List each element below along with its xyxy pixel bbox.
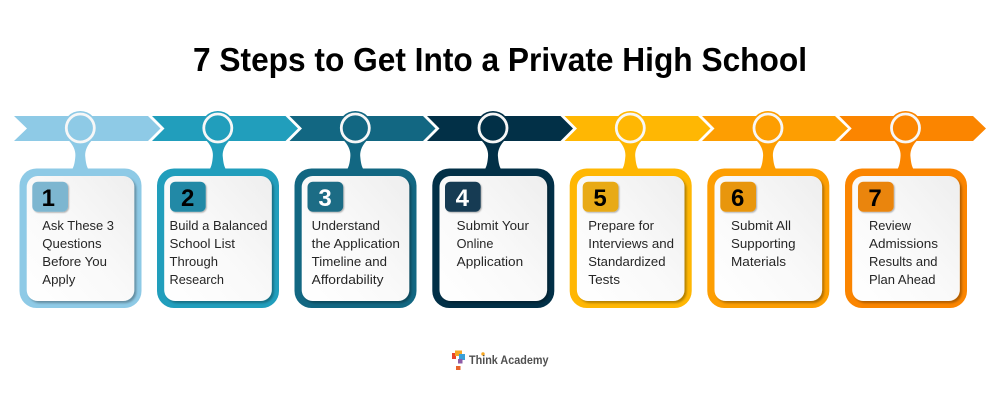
card 6 xyxy=(707,168,829,308)
step 7 xyxy=(839,111,986,308)
connector 1 xyxy=(63,111,97,170)
step 2 xyxy=(152,111,298,308)
arrow 4 xyxy=(427,116,573,141)
card 2 xyxy=(157,168,279,308)
step 3 xyxy=(290,111,436,308)
card 5 panel xyxy=(577,176,684,301)
card 1 xyxy=(20,168,142,308)
step 7 text: Plan Ahead xyxy=(869,273,936,287)
card 1 panel xyxy=(27,176,134,301)
step 2 text xyxy=(170,219,268,287)
title: 7 Steps to Get Into a Private High School xyxy=(193,42,807,79)
step 4 text: Submit Your xyxy=(457,219,529,233)
step 5 xyxy=(564,111,710,308)
step 1 text xyxy=(42,219,114,287)
step 1 text: Before You xyxy=(42,255,107,269)
step 3 text xyxy=(312,219,400,287)
step 1 text: Apply xyxy=(42,273,76,287)
number 7: 7 xyxy=(868,185,882,212)
step 1 xyxy=(14,111,160,308)
step 5 text: Prepare for xyxy=(588,219,654,233)
step 3 text: Affordability xyxy=(312,273,384,287)
card 3 panel xyxy=(302,176,409,301)
logo: Think Academy xyxy=(452,350,549,370)
arrow 2 xyxy=(152,116,298,141)
connector 2 xyxy=(201,111,235,170)
connector 4 xyxy=(476,111,510,170)
number 6: 6 xyxy=(731,185,744,212)
step 4 text xyxy=(457,219,529,269)
step 4 text: Online xyxy=(457,237,493,251)
badge 1 xyxy=(32,182,68,212)
card 2 panel xyxy=(164,176,272,301)
number 4: 4 xyxy=(456,185,470,212)
card 3 xyxy=(294,168,416,308)
step 2 text: Build a Balanced xyxy=(170,219,268,233)
card 4 panel xyxy=(440,176,547,301)
badge 7 xyxy=(858,182,894,212)
step 7 text: Review xyxy=(869,219,912,233)
step 3 text: Understand xyxy=(312,219,380,233)
badge 3 xyxy=(308,182,343,212)
connector 7 xyxy=(888,111,922,170)
logo icon xyxy=(452,350,465,370)
step 6 text: Supporting xyxy=(731,237,796,251)
connector 5 xyxy=(613,111,647,170)
step 1 text: Ask These 3 xyxy=(42,219,114,233)
card 7 xyxy=(845,168,967,308)
badge 6 xyxy=(720,182,756,212)
step 5 text: Tests xyxy=(588,273,620,287)
step 5 text: Interviews and xyxy=(588,237,674,251)
logo text: Think Academy xyxy=(469,355,549,367)
badge 5 xyxy=(583,182,618,212)
step 7 text xyxy=(869,219,938,287)
arrow 7 xyxy=(839,116,986,141)
step 7 text: Admissions xyxy=(869,237,938,251)
card 6 panel xyxy=(714,176,822,301)
step 2 text: School List xyxy=(170,237,236,251)
step 2 text: Through xyxy=(170,255,218,269)
card 7 panel xyxy=(852,176,960,301)
step 4 text: Application xyxy=(457,255,523,269)
badge 2 xyxy=(170,182,206,212)
arrow 6 xyxy=(702,116,848,141)
step 5 text: Standardized xyxy=(588,255,666,269)
step 3 text: Timeline and xyxy=(312,255,387,269)
connector 3 xyxy=(338,111,372,170)
connector 6 xyxy=(751,111,785,170)
step 7 text: Results and xyxy=(869,255,938,269)
number 5: 5 xyxy=(593,185,607,212)
number 1: 1 xyxy=(42,185,55,212)
card 5 xyxy=(570,168,692,308)
step 6 text: Materials xyxy=(731,255,786,269)
step 2 text: Research xyxy=(170,273,224,287)
number 3: 3 xyxy=(318,185,332,212)
logo bulb xyxy=(481,352,485,356)
step 6 text: Submit All xyxy=(731,219,791,233)
step 4 xyxy=(427,111,573,308)
arrow 5 xyxy=(564,116,710,141)
arrow 3 xyxy=(290,116,436,141)
step 3 text: the Application xyxy=(312,237,400,251)
badge 4 xyxy=(445,182,481,212)
step 5 text xyxy=(588,219,674,287)
step 1 text: Questions xyxy=(42,237,102,251)
step 6 xyxy=(702,111,848,308)
arrow 1 xyxy=(14,116,160,141)
step 6 text xyxy=(731,219,796,269)
number 2: 2 xyxy=(181,185,194,212)
card 4 xyxy=(432,168,554,308)
